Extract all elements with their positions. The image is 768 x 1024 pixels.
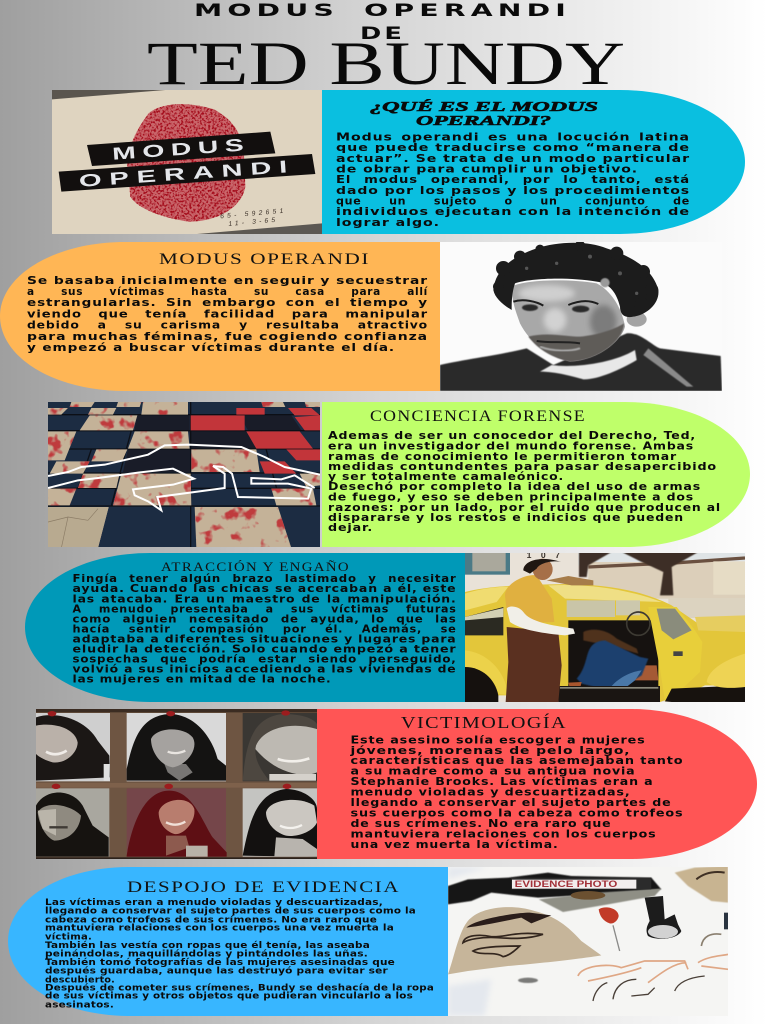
panel: modus operandi [0,240,722,392]
text block: definition: que puede traducirse como “manera de [336,142,690,154]
text block: victim profile: menudo violadas y descuartizadas, [350,786,630,798]
text block: method: Se basaba inicialmente en seguir y secuestrar [27,275,428,287]
text block: definition: actuar”. Se trata de un modo particular [336,153,690,165]
text block: method: para muchas féminas, fue cogiendo confianza [27,331,428,343]
text block: forensic knowledge [328,430,721,534]
text block: forensic knowledge: dejar. [328,522,373,534]
image: Bundy beside yellow Volkswagen: 107 [527,550,560,560]
heading: despojo de evidencia: DESPOJO DE EVIDENCIA [127,879,400,896]
text block: forensic knowledge: dispararse y los restos e indicios que pueden [328,512,684,524]
text block: evidence disposal: También tomó fotografías de las mujeres asesinadas que [45,957,395,968]
image: fingerprint with modus operandi labels: 65- 592651 [220,208,284,220]
text block: method: estrangularlas. Sin embargo con el tiempo y [27,297,428,309]
text block: evidence disposal: llegando a conservar el sujeto partes de sus cuerpos como la [45,906,416,917]
text block: deception: volvió a sus inicios accediendo a las viviendas de [72,664,456,676]
text block: method: viendo que tenía facilidad para manipular [27,308,428,320]
image: fingerprint with modus operandi labels: MODUS [111,134,251,164]
panel shape: teal pill [25,553,465,702]
text block: deception: eludir la detección. Solo cuando empezó a tener [72,644,457,656]
portrait top left [36,713,110,781]
text block: deception: como alguien necesitado de ayuda, lo que las [72,614,456,626]
text block: evidence disposal: de sus víctimas y otros objetos que pudieran vincularlo a los [45,991,413,1002]
heading: qué es [370,98,598,129]
heading: modus operandi: MODUS OPERANDI [159,251,370,268]
portrait top center [127,713,226,781]
text block: victim profile: mantuviera relaciones con los cuerpos [350,828,656,840]
text block: definition: de obrar para cumplir un objetivo. [336,164,638,176]
panel shape: red pill [317,709,757,859]
text block: definition [336,132,690,229]
text block: definition: Modus operandi es una locución latina [336,132,690,144]
image: portrait of Ted Bundy [440,240,722,392]
text block: evidence disposal: También las vestía con ropas que él tenía, las aseaba [45,940,370,951]
text block: deception: las mujeres en mitad de la noche. [72,674,332,686]
text block: evidence disposal: Después de cometer sus crímenes, Bundy se deshacía de la ropa [45,982,434,994]
text block: definition: El modus operandi, por lo tanto, está [336,174,690,186]
panel shape: lime pill [322,402,750,547]
text block: deception [72,573,457,686]
text block: victim profile: Stephanie Brooks. Las víctimas eran a [350,776,654,788]
panel shape: orange pill [0,242,440,391]
text block: method: a sus víctimas hasta su casa para allí [27,286,429,298]
text block: victim profile: sus cuerpos como la cabeza como trofeos [350,808,684,820]
text block: method [27,275,429,354]
text block: victim profile: a su madre como a su antigua novia [350,766,636,778]
heading: victimología: VICTIMOLOGÍA [401,713,567,732]
text block: evidence disposal: víctima. [45,931,92,942]
text block: forensic knowledge: razones: por un lado, por el ruido que producen al [328,502,721,514]
image: Bundy beside yellow Volkswagen [465,550,745,702]
panel: atracción y engaño [25,550,745,702]
text block: evidence disposal: peinándolas, maquillándolas y pintándoles las uñas. [45,948,368,959]
title: DE [360,24,405,43]
text block: victim profile: Este asesino solía escoger a mujeres [350,734,646,746]
text block: deception: ayuda. Cuando las chicas se acercaban a él, este [72,583,456,595]
text block: definition: individuos ejecutan con la intención de [336,206,690,218]
text block: forensic knowledge: Ademas de ser un conocedor del Derecho, Ted, [328,430,696,442]
panel shape: cyan pill [322,90,745,234]
text block: method: y empezó a buscar víctimas durante el día. [27,342,395,354]
text block: definition: lograr algo. [336,217,440,229]
text block: evidence disposal: cabeza como trofeos de sus crímenes. No era raro que [45,914,377,925]
text block: deception: Fingía tener algún brazo lastimado y necesitar [72,573,457,585]
heading: qué es: ¿QUÉ ES EL MODUS [370,98,598,115]
portrait bottom center [127,788,227,857]
text block: evidence disposal: mantuviera relaciones con los cuerpos una vez muerta la [45,923,394,934]
text block: forensic knowledge: era un investigador del mundo forense. Ambas [328,440,694,452]
heading: conciencia forense: CONCIENCIA FORENSE [370,408,586,425]
image: fingerprint with modus operandi labels: OPERANDI [78,156,296,191]
title: MODUS OPERANDI [194,1,571,20]
panel: victimología [36,709,757,859]
panel: qué es el modus operandi [52,90,745,235]
text block: evidence disposal: descubierto. [45,974,115,985]
text block: deception: adaptaba a diferentes situaciones y lugares para [72,634,456,646]
text block: deception: sospechas que podría estar siendo perseguido, [72,654,456,666]
panel shape: blue pill [8,867,448,1016]
portrait bottom right [243,788,317,857]
text block: method: debido a su carisma y resultaba atractivo [27,320,428,332]
portrait bottom left [36,788,109,857]
text block: evidence disposal: Las víctimas eran a menudo violadas y descuartizadas, [45,897,383,908]
image: fingerprint with modus operandi labels [52,90,322,235]
portrait top right [243,713,317,781]
title: TED BUNDY [147,31,625,98]
image: fingerprint with modus operandi labels: 11- 3-65 [228,217,276,228]
title [147,1,625,98]
text block: victim profile [349,734,684,851]
image: crime scene outline on bloody tiles [48,402,320,548]
text block: deception: hacía sentir compasión por él. Además, se [72,624,457,636]
text block: forensic knowledge: Desechó por completo la idea del uso de armas [328,481,701,493]
text block: forensic knowledge: de fuego, y eso se deben principalmente a dos [328,492,694,504]
text block: evidence disposal: asesinatos. [45,999,114,1010]
text block: victim profile: una vez muerta la víctima. [350,839,558,851]
image: six victim portraits on brick wall [36,709,317,859]
heading: qué es: OPERANDI? [416,114,551,129]
panel: despojo de evidencia [8,866,728,1016]
text block: forensic knowledge: y ser totalmente camaleónico. [328,471,564,483]
text block: deception: las atacaba. Era un maestro de la manipulación. [72,594,456,606]
text block: deception: A menudo presentaba a sus víctimas futuras [72,604,456,616]
text block: victim profile: llegando a conservar el sujeto partes de [350,797,672,809]
text block: evidence disposal [45,897,434,1010]
text block: victim profile: características que las asemejaban tanto [350,755,684,767]
image: evidence photo with mask and tools: EVIDENCE PHOTO [515,879,617,889]
text block: definition: que un sujeto o un conjunto de [336,196,690,208]
panel: conciencia forense [48,402,750,548]
text block: victim profile: de sus crímenes. No era raro que [350,818,612,830]
text block: evidence disposal: después guardaba, aunque las destruyó para evitar ser [45,966,388,977]
text block: victim profile: jóvenes, morenas de pelo largo, [349,745,630,757]
text block: forensic knowledge: ramas de conocimiento le permitieron tomar [328,451,677,463]
text block: definition: dado por los pasos y los procedimientos [336,185,690,197]
text block: forensic knowledge: medidas contundentes para pasar desapercibido [328,461,717,473]
heading: atracción y engaño: ATRACCIÓN Y ENGAÑO [161,559,350,574]
image: evidence photo with mask and tools [448,866,728,1016]
